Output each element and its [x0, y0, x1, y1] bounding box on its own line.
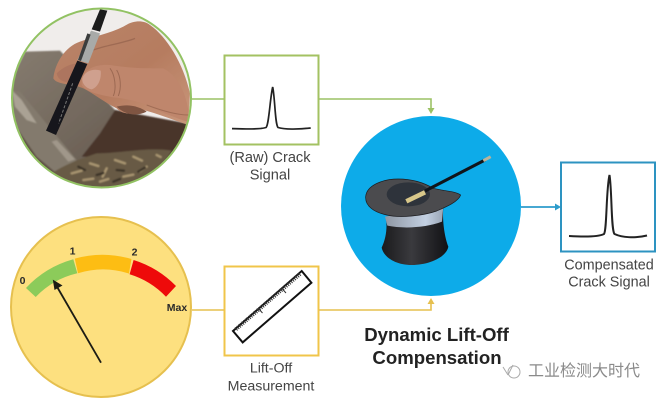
panel: magic hat circle	[341, 116, 521, 296]
watermark text: 工业检测大时代	[528, 362, 640, 380]
gauge scale labels: 2	[132, 246, 138, 258]
panel: raw crack signal	[224, 56, 318, 144]
arrow: lift-off to hat	[319, 298, 434, 310]
gauge scale labels: Max	[167, 302, 187, 314]
label: compensated crack signal: Crack Signal	[568, 274, 650, 290]
connector: gauge to lift-off box	[192, 309, 224, 311]
icon: ruler	[233, 271, 311, 342]
gauge dial	[11, 217, 191, 397]
thumb	[82, 65, 188, 122]
gauge scale labels: 0	[20, 275, 26, 287]
arrow: raw signal to hat	[319, 99, 434, 114]
icon: top hat and wand	[366, 157, 491, 265]
label: lift-off measurement: Lift-Off	[250, 360, 292, 376]
gauge band: green	[26, 259, 77, 297]
pen	[92, 9, 107, 32]
chart: compensated peak	[569, 175, 647, 237]
watermark	[503, 362, 640, 380]
gauge band: amber	[75, 255, 131, 274]
heading: dynamic lift-off compensation: Compensation	[372, 347, 502, 368]
panel: lift-off measurement	[224, 266, 318, 356]
arrow: hat to compensated signal	[521, 204, 561, 210]
gauge scale labels: 1	[70, 246, 76, 258]
photo: hand holding probe on weld	[7, 6, 194, 200]
icon: watermark logo	[503, 365, 520, 378]
label: lift-off measurement: Measurement	[228, 378, 314, 394]
connector: photo to raw crack signal	[192, 98, 224, 100]
label: raw crack signal: (Raw) Crack	[229, 150, 311, 166]
heading: dynamic lift-off compensation: Dynamic Lift-Off	[364, 324, 510, 345]
gauge scale labels	[20, 246, 187, 314]
gauge needle	[53, 280, 101, 363]
label: raw crack signal: Signal	[250, 168, 290, 184]
panel: compensated crack signal	[561, 162, 655, 252]
label: compensated crack signal: Compensated	[564, 258, 654, 274]
chart: raw crack peak	[232, 87, 311, 129]
gauge band: red	[130, 260, 176, 297]
hand behind pen	[53, 21, 190, 125]
